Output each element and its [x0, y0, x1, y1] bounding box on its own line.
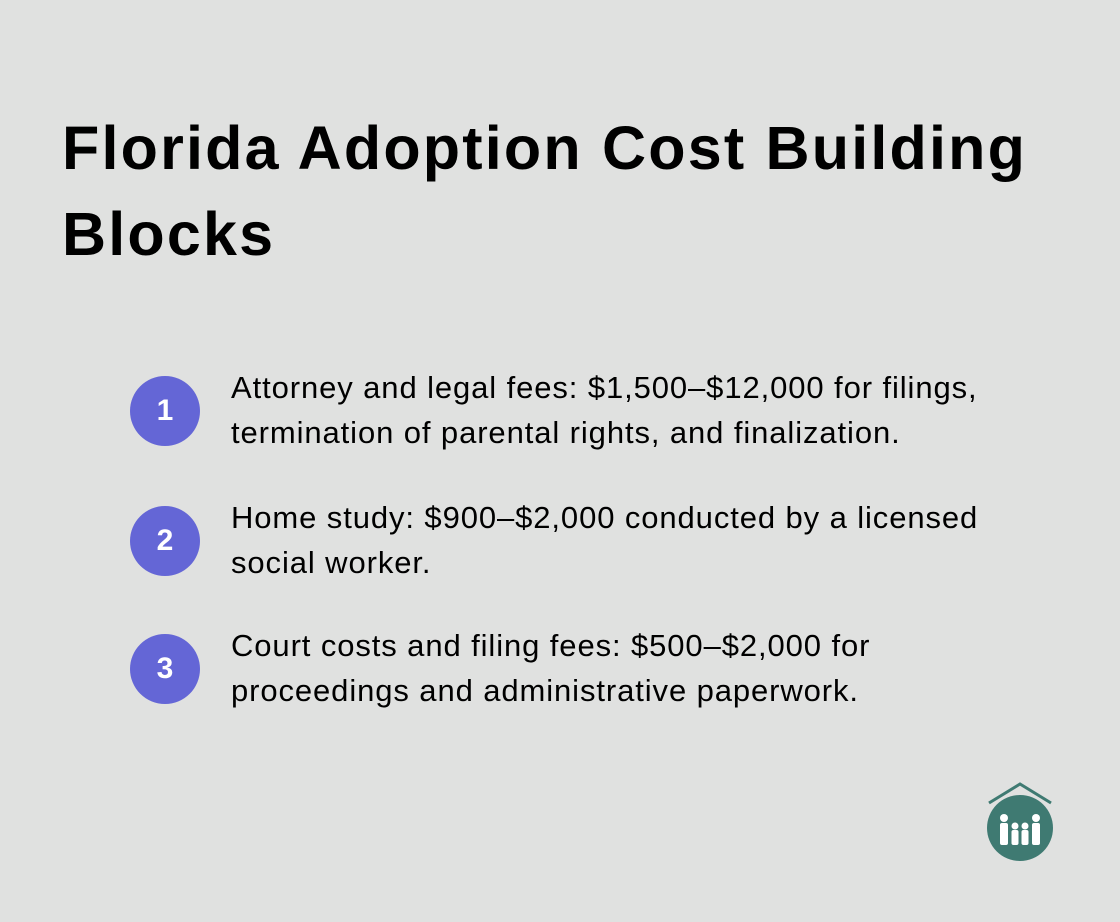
item 1 [130, 370, 978, 450]
title [62, 114, 1027, 268]
title: Florida Adoption Cost Building [62, 114, 1027, 182]
badge 2: 2 [157, 524, 173, 557]
text 1: Attorney and legal fees: $1,500–$12,000 for filings, [231, 370, 978, 405]
text 3 [231, 628, 870, 708]
icon: logo [987, 782, 1053, 861]
text 2 [231, 500, 978, 580]
text 2: Home study: $900–$2,000 conducted by a licensed [231, 500, 978, 535]
title: Blocks [62, 200, 275, 268]
badge 2 [130, 506, 200, 576]
text 1: termination of parental rights, and finalization. [231, 415, 901, 450]
badge 3: 3 [157, 652, 173, 685]
text 3: Court costs and filing fees: $500–$2,000 for [231, 628, 870, 663]
text 2: social worker. [231, 545, 431, 580]
badge 3 [130, 634, 200, 704]
text 3: proceedings and administrative paperwork. [231, 673, 859, 708]
badge 1 [130, 376, 200, 446]
badge 1: 1 [157, 394, 173, 427]
item 3 [130, 628, 870, 708]
text 1 [231, 370, 978, 450]
item 2 [130, 500, 978, 580]
